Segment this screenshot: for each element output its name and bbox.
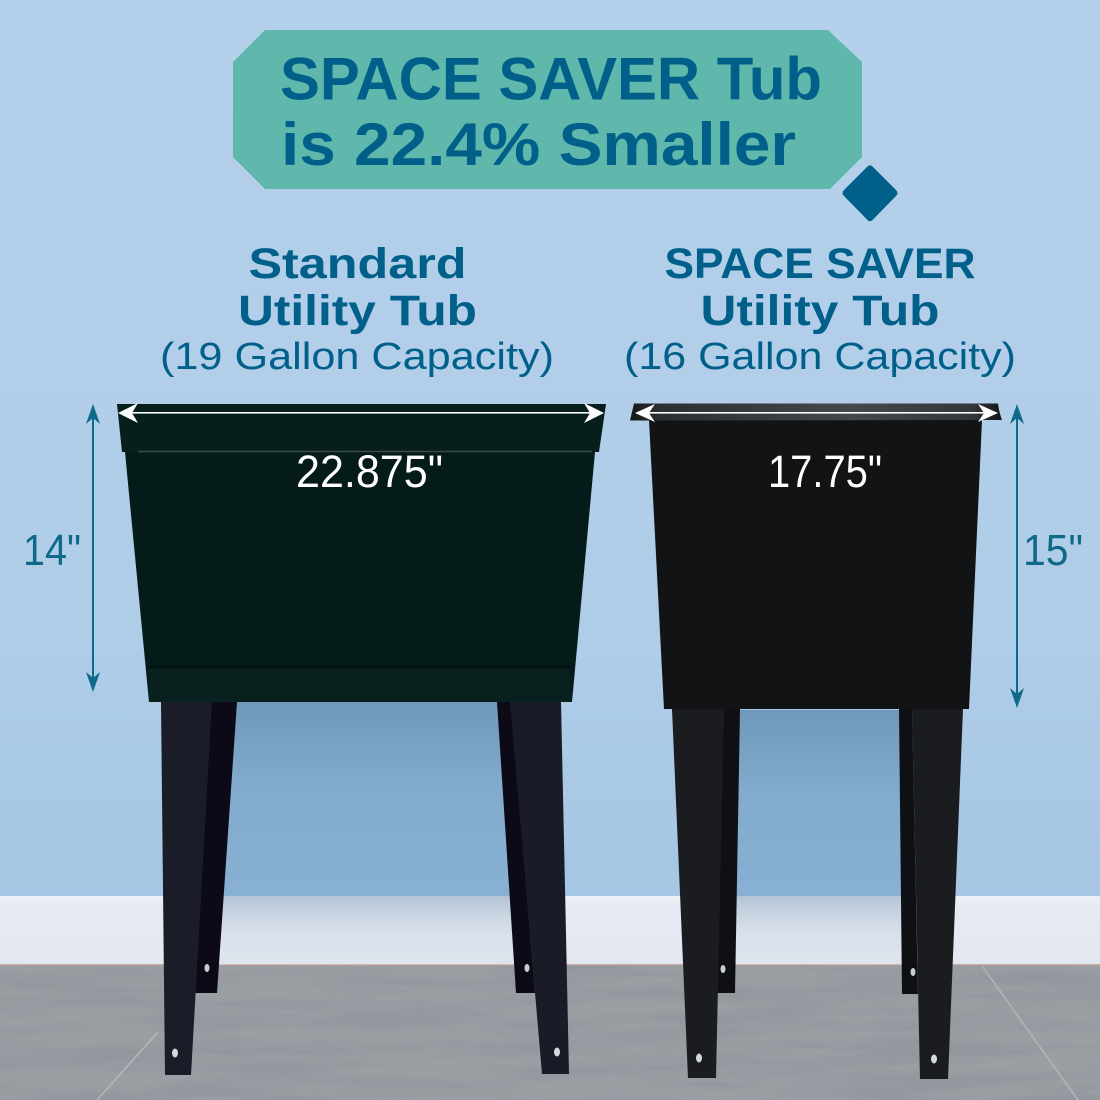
title banner: SPACE SAVER Tub [280,46,822,112]
diamond accent [842,165,898,221]
label: space saver width: 17.75" [768,446,882,497]
heading: standard tub: (19 Gallon Capacity) [160,336,554,378]
arrow: standard tub height [86,404,100,692]
standard tub legs [161,702,569,1075]
heading: standard tub [160,240,554,378]
tub shadows on wall [170,702,955,965]
arrow: standard tub width [118,403,604,423]
baseboard [0,896,1100,966]
title banner: is 22.4% Smaller [281,111,796,178]
label: space saver height: 15" [1023,526,1083,575]
space saver tub body [630,404,1002,709]
heading: standard tub: Utility Tub [238,287,477,335]
arrow: space saver tub height [1010,404,1024,708]
label: standard height: 14" [23,526,81,575]
heading: standard tub: Standard [248,240,466,288]
label: standard width: 22.875" [296,446,443,497]
heading: space saver tub: (16 Gallon Capacity) [624,336,1016,378]
heading: space saver tub: SPACE SAVER [664,240,976,288]
heading: space saver tub [624,240,1016,378]
standard tub body [117,404,606,702]
space saver tub legs [672,709,963,1079]
floor [0,965,1100,1100]
arrow: space saver tub width [635,404,998,422]
heading: space saver tub: Utility Tub [700,287,940,335]
title banner [233,30,862,189]
